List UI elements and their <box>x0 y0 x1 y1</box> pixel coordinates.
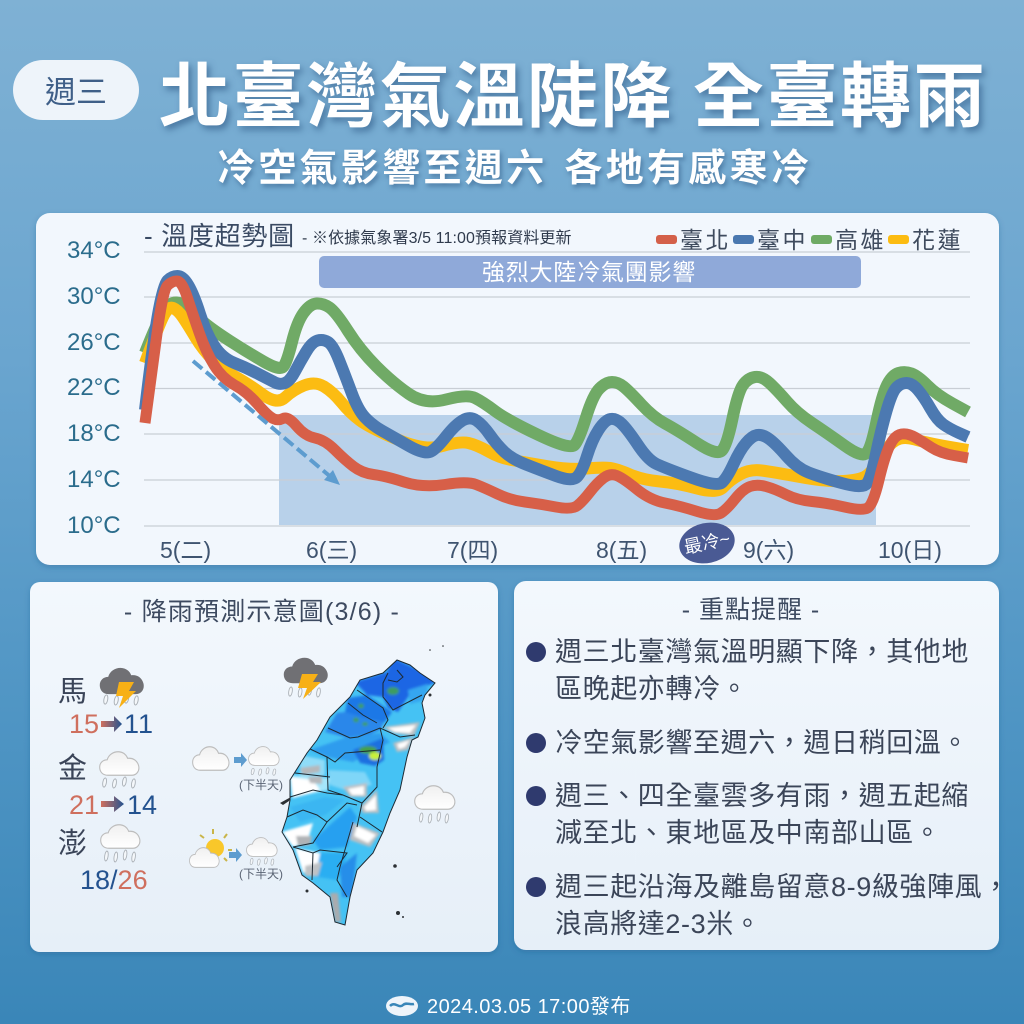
reminder 3: 週三、四全臺雲多有雨，週五起縮 <box>555 781 969 811</box>
reminder 3: 減至北、東地區及中南部山區。 <box>555 818 941 848</box>
icon: southwest sun to rain <box>190 829 283 881</box>
reminder 2: 冷空氣影響至週六，週日稍回溫。 <box>555 728 969 758</box>
title: 北臺灣氣溫陡降 全臺轉雨 <box>159 40 987 142</box>
outlying islands: Matsu: 馬 <box>58 676 87 708</box>
arrow: cooling trend <box>193 361 340 485</box>
outlying islands: Penghu: 18/26 <box>80 865 148 895</box>
county lines <box>287 670 422 897</box>
x axis labels: 7(四) <box>447 537 498 563</box>
y axis labels: 14°C <box>67 466 121 493</box>
footer: publisher logo and date: 2024.03.05 17:00發布 <box>427 995 631 1018</box>
icon: central west cloud to rain <box>193 747 283 792</box>
icon: central west cloud to rain: (下半天) <box>239 778 283 792</box>
y axis labels: 26°C <box>67 329 121 356</box>
reminder 4: 浪高將達2-3米。 <box>555 909 761 939</box>
y axis labels: 30°C <box>67 283 121 310</box>
panel: key reminders <box>514 581 1010 950</box>
reminder 1 <box>526 637 969 704</box>
rainfall heading: - 降雨預測示意圖(3/6) - <box>124 598 400 626</box>
x axis labels <box>160 537 942 563</box>
outlying islands: Kinmen: 21 <box>69 790 99 820</box>
reminder 4: 週三起沿海及離島留意8-9級強陣風， <box>555 872 1010 902</box>
coldest day badge: 最冷~ <box>682 528 732 558</box>
reminder 1: 區晚起亦轉冷。 <box>555 674 748 704</box>
reminder 4 <box>526 872 1010 939</box>
line: Hualien <box>145 308 968 491</box>
data source note: - ※依據氣象署3/5 11:00預報資料更新 <box>302 229 572 247</box>
line: Taipei <box>145 281 968 515</box>
map: Taiwan rainfall <box>275 645 444 930</box>
coldest day badge <box>675 518 739 568</box>
cold air mass banner <box>319 256 861 288</box>
legend: 臺北 <box>680 227 731 253</box>
icon: north storm <box>284 658 328 699</box>
icon: southwest sun to rain: (下半天) <box>239 867 283 881</box>
reminders heading: - 重點提醒 - <box>682 596 820 624</box>
icon: east rain cloud <box>415 786 455 823</box>
x axis labels: 8(五) <box>596 537 647 563</box>
cold period shaded band <box>279 415 876 525</box>
y axis labels <box>67 237 121 539</box>
legend: 臺中 <box>757 227 808 253</box>
outlying islands: Kinmen: 14 <box>127 790 157 820</box>
outlying islands: Matsu: 15 <box>69 709 99 739</box>
line: Taichung <box>145 276 968 486</box>
legend <box>656 227 963 253</box>
outlying islands: Kinmen: 金 <box>58 752 87 785</box>
x axis labels: 5(二) <box>160 537 211 563</box>
x axis labels: 10(日) <box>878 537 942 563</box>
line: Kaohsiung <box>145 302 968 454</box>
outlying islands: Matsu: 11 <box>124 709 154 739</box>
legend: 高雄 <box>835 227 886 253</box>
y axis labels: 10°C <box>67 512 121 539</box>
outlying islands: Matsu <box>58 668 154 739</box>
subtitle: 冷空氣影響至週六 各地有感寒冷 <box>217 137 812 192</box>
panel: temperature trend chart <box>36 213 999 568</box>
cold air mass banner: 強烈大陸冷氣團影響 <box>482 259 696 285</box>
x axis labels: 6(三) <box>306 537 357 563</box>
x axis labels: 9(六) <box>743 537 794 563</box>
outlying islands: Penghu: 澎 <box>58 827 87 860</box>
y axis labels: 34°C <box>67 237 121 264</box>
panel: rainfall forecast <box>30 582 498 952</box>
reminder 3 <box>526 781 969 848</box>
y axis labels: 22°C <box>67 374 121 401</box>
legend: 花蓮 <box>912 227 963 253</box>
chart heading: - 溫度超勢圖 <box>144 221 295 251</box>
outlying islands: Penghu <box>58 825 148 895</box>
y axis labels: 18°C <box>67 420 121 447</box>
reminder 1: 週三北臺灣氣溫明顯下降，其他地 <box>555 637 969 667</box>
outlying islands: Kinmen <box>58 752 157 820</box>
date pill <box>13 60 139 120</box>
date pill: 週三 <box>45 67 107 112</box>
